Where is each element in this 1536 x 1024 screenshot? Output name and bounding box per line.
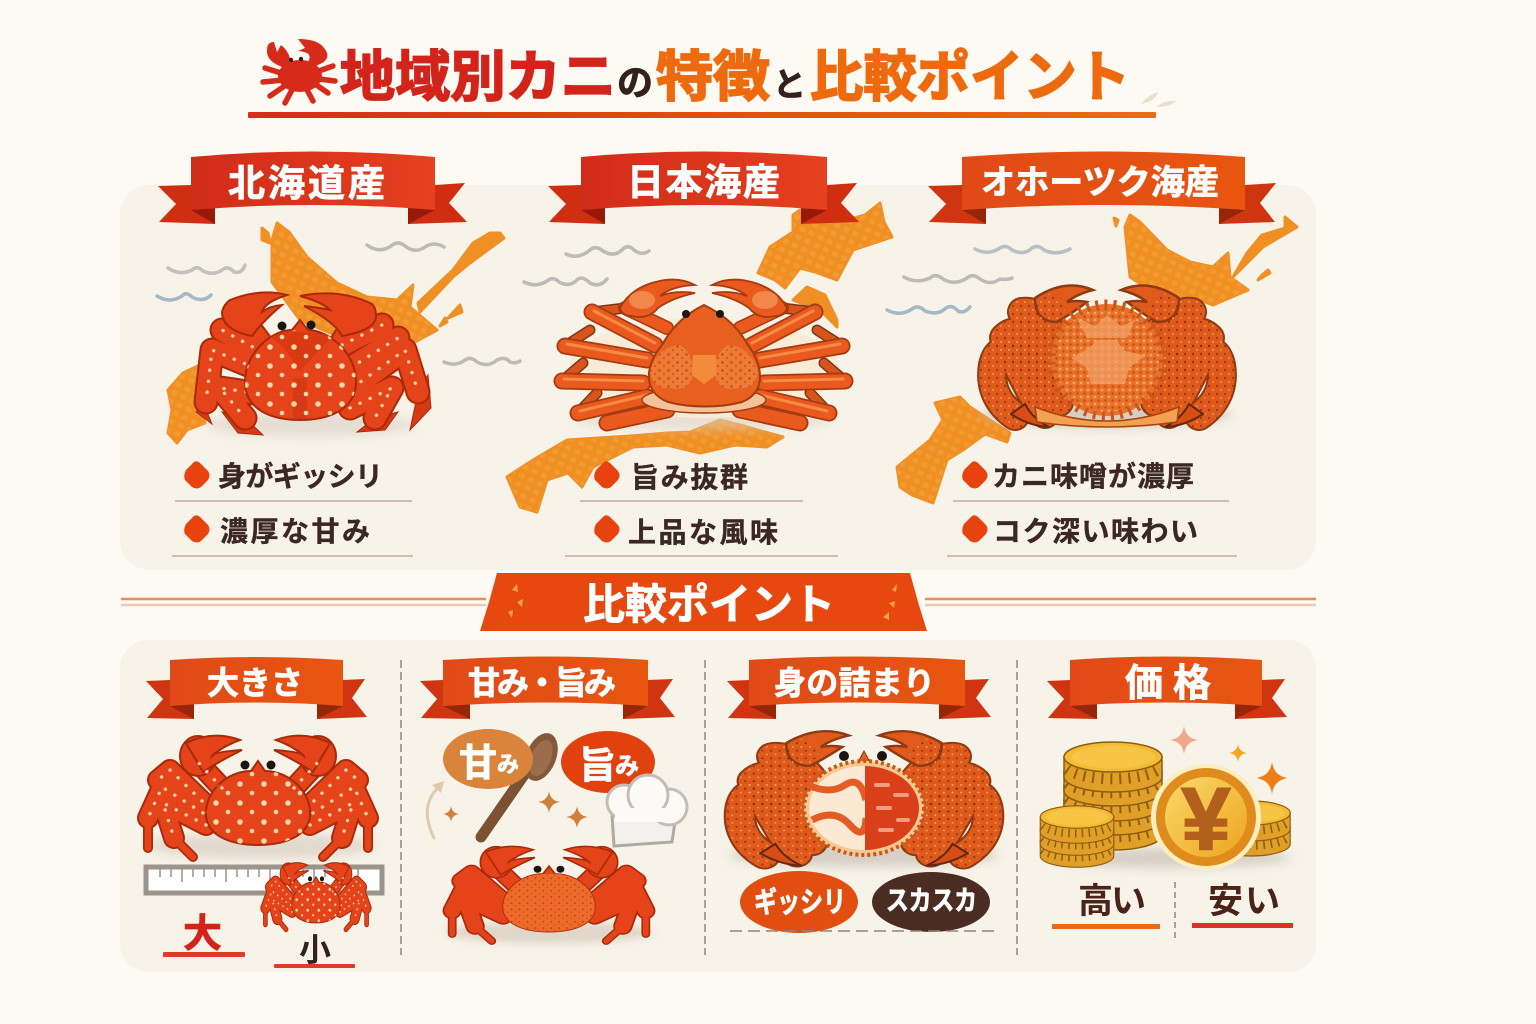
ribbon: オホーツク海産: オホーツク海産 (981, 164, 1219, 202)
icon: chef hat (607, 775, 687, 846)
crab: large (146, 736, 376, 859)
banner: 比較ポイント (121, 573, 1316, 631)
waves (524, 247, 649, 285)
panel: price (1040, 656, 1293, 938)
title text: 比較ポイント (810, 46, 1130, 108)
ribbon: 大きさ (146, 657, 367, 719)
panel: comparison background (120, 640, 1316, 972)
icon: coins and yen: ¥ (1182, 769, 1231, 868)
badge: スカスカ: スカスカ (886, 886, 977, 916)
banner: 比較ポイント: 比較ポイント (583, 581, 835, 628)
label: 高い: 高い (1078, 882, 1146, 921)
map: Okhotsk (897, 215, 1297, 503)
map: Sea of Japan (507, 203, 892, 512)
crab: hairy crab (982, 286, 1232, 428)
sparkles (443, 791, 588, 828)
ribbon: 北海道産 (158, 152, 467, 224)
ribbon: オホーツク海産 (928, 152, 1276, 224)
icon: coins and yen (1040, 742, 1290, 870)
label: 高い (1052, 882, 1160, 929)
panel: Hokkaido (157, 152, 520, 556)
sparkles (1170, 726, 1288, 794)
title text: 地域別カニ (340, 46, 616, 108)
badge: 旨み: 旨 (579, 745, 616, 786)
panel: regions background (120, 185, 1316, 570)
crab: cross-section (729, 731, 999, 867)
badge: ギッシリ (740, 871, 858, 933)
badge: スカスカ (872, 872, 990, 932)
ribbon: 価格: 価格 (1125, 663, 1211, 705)
title text: と (773, 66, 806, 103)
crab: king crab (196, 292, 431, 437)
badge: 旨み (561, 731, 655, 793)
bullet list: Sea of Japan: 旨み抜群 (631, 462, 748, 493)
ribbon: 身の詰まり (727, 656, 991, 719)
ruler (146, 867, 382, 893)
panel: Sea of Japan (507, 152, 892, 556)
bullet list: Okhotsk: カニ味噌が濃厚 (992, 460, 1194, 492)
badge: 甘み: 甘 (459, 743, 497, 785)
bullet list: Hokkaido: 濃厚な甘み (220, 516, 370, 547)
bullet list: Sea of Japan: 上品な風味 (628, 517, 778, 548)
crab: small (265, 863, 367, 929)
bullet list: Hokkaido (172, 460, 413, 556)
ribbon: 価格 (1047, 656, 1287, 719)
crab: snow crab (562, 280, 845, 430)
waves (887, 246, 1070, 313)
title (248, 39, 1176, 118)
ribbon: 北海道産: 北海道産 (228, 163, 385, 204)
badge: 甘み: み (497, 752, 519, 777)
ribbon: 甘み・旨み: 甘み・旨み (468, 665, 616, 701)
label: 大: 大 (183, 913, 222, 956)
ribbon: 大きさ: 大きさ (207, 665, 303, 701)
panel: Okhotsk (887, 152, 1297, 556)
icon: spoon (481, 728, 564, 837)
label: 安い (1192, 882, 1293, 928)
title text (340, 46, 1130, 108)
ribbon: 身の詰まり: 身の詰まり (774, 665, 935, 701)
crab: medium (445, 846, 653, 943)
bullet list: Okhotsk (947, 460, 1237, 556)
bullet list: Okhotsk: コク深い味わい (993, 516, 1198, 547)
label: 安い: 安い (1208, 882, 1280, 921)
panel: sweetness and umami (420, 656, 687, 943)
ribbon: 甘み・旨み (420, 656, 675, 719)
arrow: curved (427, 781, 444, 838)
badge: ギッシリ: ギッシリ (754, 886, 846, 919)
ribbon: 日本海産: 日本海産 (627, 162, 780, 203)
panel: meat fullness (727, 656, 1000, 933)
bullet list: Hokkaido: 身がギッシリ (218, 460, 383, 492)
icon: red crab (263, 39, 335, 103)
badge: 甘み (443, 729, 533, 789)
infographic (120, 39, 1316, 972)
title text: 特徴 (656, 46, 770, 108)
label: 大 (163, 913, 245, 957)
panel: size (146, 657, 382, 968)
label: 小 (274, 932, 355, 968)
title text: の (617, 62, 653, 103)
bullet list: Sea of Japan (565, 461, 838, 556)
map: Hokkaido (168, 223, 504, 443)
badge: 旨み: み (615, 753, 639, 780)
waves (157, 243, 520, 365)
label: 小: 小 (299, 932, 331, 968)
ribbon: 日本海産 (548, 152, 859, 224)
